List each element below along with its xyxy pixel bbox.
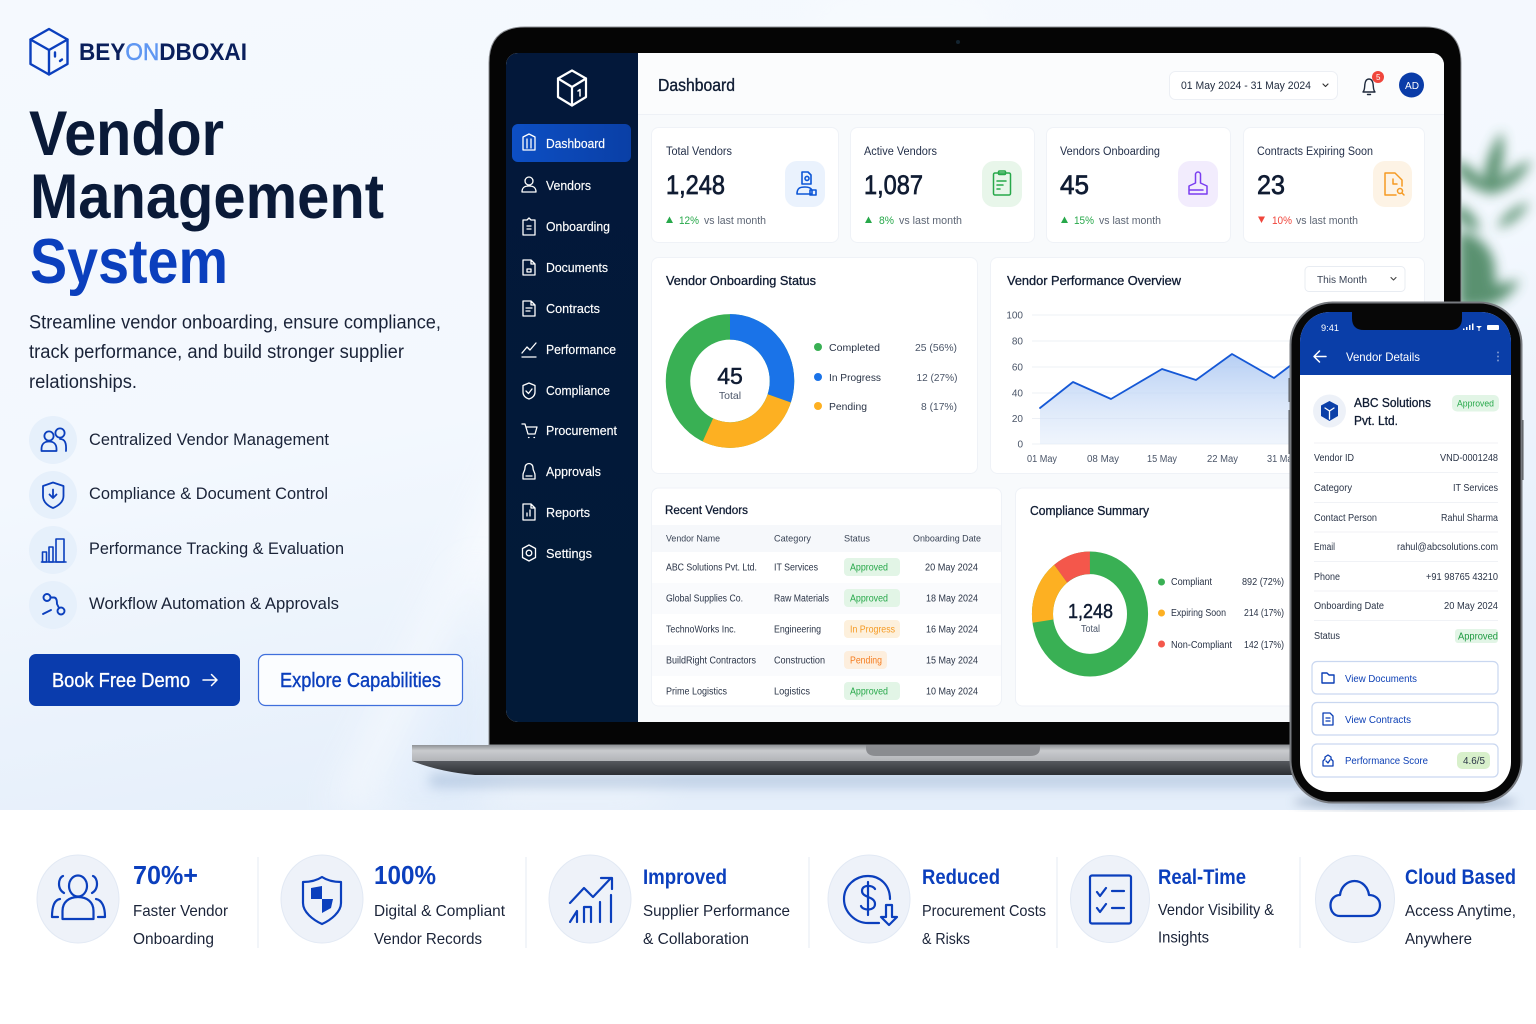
vendor detail rows: Category <box>1314 483 1352 494</box>
row: TechnoWorks: 16 May 2024 <box>926 624 978 636</box>
status time: 9:41 <box>1321 323 1339 334</box>
KPI: total vendors: 1,248 <box>666 170 725 200</box>
stat description: Access Anytime, <box>1405 903 1516 920</box>
brand name: BEYONDBOXAI <box>79 39 247 66</box>
panel: vendor onboarding status <box>652 258 978 474</box>
donut centre value <box>1069 604 1112 632</box>
button: explore capabilities: Explore Capabilities <box>280 670 441 692</box>
subtitle paragraph: track performance, and build stronger supplier <box>29 342 405 363</box>
row: TechnoWorks: TechnoWorks Inc. <box>666 624 736 636</box>
row: Global Supplies: Raw Materials <box>774 594 829 604</box>
vendor detail rows: Email <box>1314 542 1335 553</box>
stat description: Vendor Records <box>374 931 482 948</box>
vendor detail rows: Onboarding Date <box>1314 601 1384 612</box>
vendor detail rows: Contact Person <box>1314 513 1377 524</box>
KPI: vendors onboarding: 45 <box>1060 170 1089 200</box>
feature list <box>29 416 344 629</box>
row: Prime Logistics: 10 May 2024 <box>926 686 978 698</box>
feature: performance tracking <box>29 526 344 574</box>
feature: compliance and document control <box>29 471 328 519</box>
button: view contracts <box>1312 702 1498 735</box>
sidebar logo <box>558 70 586 106</box>
vendor detail rows: VND-0001248 <box>1440 453 1498 464</box>
stat description: Onboarding <box>133 931 214 948</box>
KPI: active vendors: 8% <box>879 215 894 227</box>
legend: 8 (17%) <box>921 401 957 413</box>
dashboard header <box>638 53 1444 115</box>
feature: compliance and document control: Compliance & Document Control <box>89 484 328 503</box>
phone shadow <box>1293 796 1517 808</box>
donut chart: compliance <box>1042 563 1138 665</box>
nav labels: Contracts <box>546 302 600 316</box>
legend: Pending <box>829 401 867 413</box>
avatar <box>1399 72 1424 98</box>
vendor detail rows: Status <box>1314 631 1340 642</box>
button: book free demo <box>29 654 240 706</box>
plant blurred background <box>1456 131 1532 308</box>
stat description: Faster Vendor <box>133 903 229 920</box>
laptop bezel <box>489 27 1461 745</box>
stat description: Vendor Visibility & <box>1158 902 1274 919</box>
nav labels: Compliance <box>546 384 610 398</box>
icon: growth chart <box>549 855 631 943</box>
legend: Completed <box>829 342 880 354</box>
row: BuildRight: 15 May 2024 <box>926 656 978 666</box>
donut centre value: Total <box>719 390 741 402</box>
feature: workflow automation <box>29 581 339 629</box>
row: BuildRight: Pending <box>850 656 882 666</box>
title: System <box>30 227 228 297</box>
status bar notch <box>1352 312 1462 330</box>
phone body <box>1290 302 1522 802</box>
stat description <box>1158 902 1274 946</box>
laptop shadow <box>430 774 1330 787</box>
feature: workflow automation: Workflow Automation & Approvals <box>89 594 339 613</box>
title <box>29 99 384 297</box>
vendor detail rows: Phone <box>1314 572 1340 583</box>
row: ABC Solutions: 20 May 2024 <box>925 562 979 574</box>
row: Global Supplies: 18 May 2024 <box>926 594 978 604</box>
stat description: & Risks <box>922 931 970 948</box>
subtitle paragraph: Streamline vendor onboarding, ensure compliance, <box>29 312 441 334</box>
row: Prime Logistics <box>666 682 978 700</box>
row: BuildRight: BuildRight Contractors <box>666 656 756 666</box>
avatar: AD <box>1405 80 1419 92</box>
button: performance score: Performance Score <box>1345 756 1428 767</box>
vendor detail rows: 20 May 2024 <box>1444 601 1498 612</box>
legend: 892 (72%) <box>1242 577 1284 588</box>
row: Global Supplies: Global Supplies Co. <box>666 594 743 604</box>
donut centre value <box>718 368 742 399</box>
stat: reduced costs <box>828 855 1046 948</box>
vendor detail rows: rahul@abcsolutions.com <box>1397 542 1498 553</box>
vendor detail rows: Rahul Sharma <box>1441 513 1498 524</box>
back arrow <box>1314 351 1326 362</box>
KPI: active vendors: vs last month <box>899 215 962 227</box>
KPI: active vendors <box>850 128 1034 242</box>
line chart: 0 <box>1017 440 1023 450</box>
legend: 25 (56%) <box>915 342 957 354</box>
feature: centralized vendor management <box>29 416 329 464</box>
stat: cloud based <box>1316 856 1516 948</box>
stat description: Anywhere <box>1405 931 1472 948</box>
table header: Category <box>774 534 811 544</box>
button: view contracts: View Contracts <box>1345 715 1411 726</box>
vendor identity: Pvt. Ltd. <box>1354 414 1398 428</box>
vendor identity: ABC Solutions <box>1354 396 1431 410</box>
KPI: active vendors: Active Vendors <box>864 146 937 158</box>
line chart: 31 May <box>1267 454 1297 465</box>
line chart: 15 May <box>1147 454 1177 465</box>
row: ABC Solutions <box>666 558 979 576</box>
donut centre value: Total <box>1081 624 1100 635</box>
button: view documents <box>1312 662 1498 694</box>
line chart: 08 May <box>1087 454 1119 465</box>
vendor detail rows: Vendor ID <box>1314 453 1354 464</box>
date picker <box>1170 72 1338 100</box>
row: ABC Solutions: ABC Solutions Pvt. Ltd. <box>666 562 757 574</box>
phone <box>1288 302 1524 808</box>
stat value: Improved <box>643 865 727 889</box>
nav labels: Reports <box>546 506 590 520</box>
stat: real-time visibility <box>1070 856 1274 946</box>
table header: Status <box>844 534 870 544</box>
row: TechnoWorks: In Progress <box>850 624 895 636</box>
stat value: Cloud Based <box>1405 865 1516 889</box>
row stripes <box>652 583 1001 676</box>
donut chart: onboarding <box>678 327 782 435</box>
button: book free demo: Book Free Demo <box>52 670 190 692</box>
stat value: 70%+ <box>133 860 198 890</box>
KPI: contracts expiring soon: vs last month <box>1296 215 1358 227</box>
KPI: total vendors: 12% <box>679 215 699 227</box>
KPI: total vendors: vs last month <box>704 215 766 227</box>
stat description <box>643 903 790 948</box>
nav icons <box>522 134 537 561</box>
panel heading: Vendor Performance Overview <box>1007 274 1182 288</box>
legend <box>1158 577 1284 651</box>
table header: Vendor Name <box>666 534 720 544</box>
icon: cloud <box>1316 856 1394 942</box>
panel heading: Vendor Onboarding Status <box>666 274 816 288</box>
subtitle paragraph <box>29 312 441 393</box>
legend: In Progress <box>829 372 881 384</box>
icon: shield <box>281 855 363 943</box>
KPI: vendors onboarding <box>1046 128 1230 242</box>
line chart: 40 <box>1012 388 1023 400</box>
laptop <box>412 27 1510 787</box>
nav labels: Settings <box>546 547 592 561</box>
button: performance score: 4.6/5 <box>1463 756 1485 767</box>
line chart: 20 <box>1012 414 1023 425</box>
row: Prime Logistics: Prime Logistics <box>666 686 727 698</box>
stat description: Procurement Costs <box>922 903 1046 920</box>
legend: Compliant <box>1171 577 1212 588</box>
line chart <box>1007 312 1302 464</box>
vendor detail rows: IT Services <box>1453 483 1498 494</box>
row: Prime Logistics: Approved <box>850 686 888 698</box>
legend <box>814 342 958 413</box>
sidebar <box>506 53 638 722</box>
line chart: 80 <box>1012 336 1023 348</box>
feature: centralized vendor management: Centralized Vendor Management <box>89 430 329 449</box>
stat description: Insights <box>1158 930 1209 946</box>
nav labels: Procurement <box>546 424 618 438</box>
button: performance score <box>1312 744 1498 777</box>
stat: digital records <box>281 855 506 948</box>
KPI: vendors onboarding: Vendors Onboarding <box>1060 146 1160 158</box>
stat description: & Collaboration <box>643 931 749 948</box>
stat value: Reduced <box>922 865 1000 889</box>
camera <box>956 40 960 44</box>
laptop base <box>412 745 1510 761</box>
KPI: contracts expiring soon: 10% <box>1272 215 1292 227</box>
panel: recent vendors table <box>652 488 1002 706</box>
button: explore capabilities <box>258 654 462 706</box>
nav labels: Onboarding <box>546 220 610 234</box>
line chart: 22 May <box>1207 454 1238 465</box>
vendor detail rows <box>1314 443 1498 643</box>
row: BuildRight: Construction <box>774 656 825 666</box>
row: BuildRight <box>666 651 978 669</box>
icon: notification bell <box>1363 71 1384 94</box>
title: Vendor <box>29 99 224 169</box>
legend: 142 (17%) <box>1244 640 1284 651</box>
stat: supplier performance <box>549 855 790 948</box>
KPI: contracts expiring soon: Contracts Expiring Soon <box>1257 146 1373 158</box>
table header <box>652 525 1001 552</box>
line chart: 60 <box>1012 362 1023 374</box>
stat description: Supplier Performance <box>643 903 790 920</box>
legend: 12 (27%) <box>916 372 958 384</box>
line chart: 100 <box>1006 310 1023 322</box>
row: ABC Solutions: IT Services <box>774 562 818 574</box>
panel: vendor performance overview <box>990 258 1424 474</box>
active item <box>512 124 631 162</box>
KPI: contracts expiring soon <box>1244 128 1424 242</box>
nav labels: Performance <box>546 343 616 357</box>
KPI: active vendors: 1,087 <box>864 170 923 200</box>
button: view documents: View Documents <box>1345 674 1417 685</box>
logo <box>30 29 247 74</box>
icon: checklist <box>1070 856 1150 942</box>
stat value: Real-Time <box>1158 865 1246 889</box>
row: Prime Logistics: Logistics <box>774 686 810 698</box>
date picker: 01 May 2024 - 31 May 2024 <box>1181 80 1311 92</box>
phone side buttons <box>1288 378 1524 480</box>
row: TechnoWorks <box>666 620 978 638</box>
row: Global Supplies: Approved <box>850 594 888 604</box>
icon: people <box>37 855 119 943</box>
vendor detail rows: +91 98765 43210 <box>1426 572 1498 583</box>
icon: logo cube <box>30 29 68 74</box>
stat description <box>133 903 229 948</box>
period dropdown: This Month <box>1317 274 1367 286</box>
stat description <box>922 903 1046 948</box>
subtitle paragraph: relationships. <box>29 372 137 393</box>
KPI: vendors onboarding: vs last month <box>1099 215 1161 227</box>
row: ABC Solutions: Approved <box>850 562 888 574</box>
donut centre value: 45 <box>717 363 743 389</box>
feature: performance tracking: Performance Tracking & Evaluation <box>89 539 344 558</box>
line chart: 01 May <box>1027 454 1057 465</box>
nav labels <box>546 137 618 561</box>
title: Management <box>30 162 384 232</box>
phone heading: Vendor Details <box>1346 350 1420 364</box>
vendor identity: Approved <box>1457 398 1494 408</box>
row: Global Supplies <box>666 589 978 607</box>
icon: dollar with down arrow <box>828 855 910 943</box>
phone header <box>1300 312 1511 375</box>
nav labels: Vendors <box>546 179 591 193</box>
KPI: total vendors <box>652 128 838 242</box>
period dropdown <box>1305 266 1405 292</box>
row: TechnoWorks: Engineering <box>774 624 821 636</box>
vendor detail rows: Approved <box>1458 632 1498 642</box>
nav labels: Dashboard <box>546 137 605 151</box>
page heading: Dashboard <box>658 75 735 95</box>
stat value: 100% <box>374 860 436 890</box>
screen <box>506 53 1444 722</box>
more menu <box>1497 352 1499 362</box>
legend: Expiring Soon <box>1171 608 1226 619</box>
KPI: contracts expiring soon: 23 <box>1257 170 1285 200</box>
stat: faster vendor onboarding <box>37 855 229 948</box>
hinge notch <box>866 745 1040 756</box>
panel: compliance summary <box>1015 488 1290 706</box>
KPI: total vendors: Total Vendors <box>666 146 732 158</box>
stat description <box>1405 903 1516 948</box>
panel heading: Recent Vendors <box>665 503 748 517</box>
KPI: vendors onboarding: 15% <box>1074 215 1094 227</box>
stat description <box>374 903 506 948</box>
icon: notification bell: 5 <box>1376 73 1381 82</box>
legend: Non-Compliant <box>1171 640 1232 651</box>
nav labels: Documents <box>546 261 608 275</box>
panel heading: Compliance Summary <box>1030 504 1150 518</box>
legend: 214 (17%) <box>1244 608 1284 619</box>
vendor identity <box>1313 394 1499 428</box>
stat description: Digital & Compliant <box>374 903 506 920</box>
table header: Onboarding Date <box>913 534 981 544</box>
laptop base lower <box>412 761 1510 775</box>
status icons <box>1463 324 1499 331</box>
donut centre value: 1,248 <box>1068 601 1113 623</box>
nav labels: Approvals <box>546 465 601 479</box>
phone screen <box>1300 312 1511 792</box>
